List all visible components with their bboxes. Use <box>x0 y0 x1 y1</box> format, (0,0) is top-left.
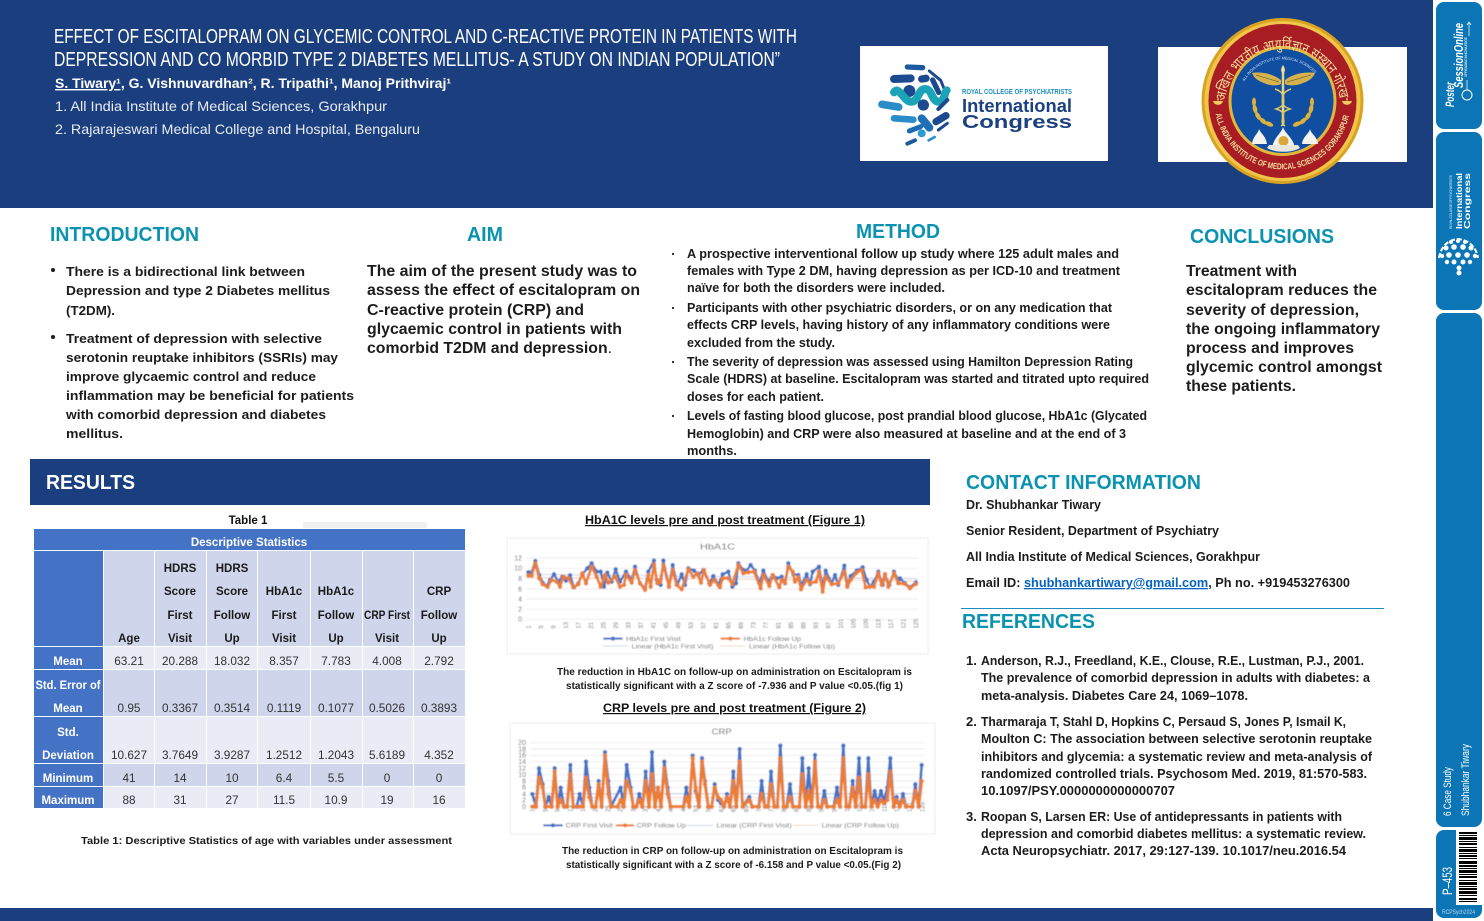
table 1: descriptive statistics: 10.627 <box>111 748 147 762</box>
chart: CRP line chart: 41 <box>656 805 662 812</box>
figure 1 caption: statistically significant with a Z score of -7.936 and P value <0.05.(fig 1) <box>566 680 903 692</box>
chart: CRP line chart: 10 <box>518 772 526 779</box>
table 1: descriptive statistics: 11.5 <box>273 793 295 807</box>
results banner <box>30 459 930 505</box>
chart: CRP line chart: 121 <box>908 801 914 812</box>
chart: HbA1c line chart: 73 <box>752 621 758 629</box>
chart: CRP line chart: 6 <box>522 785 526 792</box>
table 1: descriptive statistics <box>34 515 465 808</box>
chart: CRP line chart: 89 <box>807 805 813 812</box>
table 1: descriptive statistics: 27 <box>225 793 239 807</box>
chart: CRP line chart: 65 <box>732 805 738 812</box>
text block: method bullets: The severity of depression was assessed using Hamilton Depression Rating <box>687 354 1133 369</box>
chart: CRP line chart: 125 <box>920 801 926 812</box>
chart: CRP line chart: 69 <box>744 805 750 812</box>
figure 1 caption <box>557 666 912 692</box>
text block: conclusions <box>1186 263 1383 395</box>
text block: reference list: randomized controlled trials. Psychosom Med. 2019, 81:570-583. <box>981 766 1367 781</box>
text block: introduction bullets: serotonin reuptake inhibitors (SSRIs) may <box>66 350 339 365</box>
sidebar tab: Poster Session Online: Poster <box>1443 81 1457 107</box>
text block: contact details: Senior Resident, Department of Psychiatry <box>966 523 1220 538</box>
text block: reference list: inhibitors and glycemia: a systematic review and meta-analysis of <box>981 749 1373 764</box>
table 1: descriptive statistics: 0.3514 <box>214 701 250 715</box>
table 1: descriptive statistics: 0.3367 <box>162 701 198 715</box>
table 1: descriptive statistics: 0 <box>384 771 391 785</box>
table 1: descriptive statistics: Mean <box>53 656 83 668</box>
table 1: descriptive statistics: Follow <box>421 610 457 622</box>
table 1: descriptive statistics: Up <box>328 633 344 645</box>
chart: HbA1c line chart: 5 <box>539 625 545 629</box>
sidebar tab: poster number and barcode <box>1436 830 1482 918</box>
chart: HbA1c line chart: 29 <box>614 621 620 629</box>
text block: aim: C-reactive protein (CRP) and <box>367 302 584 319</box>
chart: CRP line chart <box>510 723 935 834</box>
affiliations: 2. Rajarajeswari Medical College and Hospital, Bengaluru <box>55 121 420 137</box>
chart: CRP line chart: 101 <box>845 801 851 812</box>
text block: reference list: Acta Neuropsychiatr. 2017, 29:127-139. 10.1017/neu.2016.54 <box>981 843 1347 858</box>
chart: CRP line chart: 105 <box>857 801 863 812</box>
chart: HbA1c line chart: 97 <box>827 621 833 629</box>
chart: CRP line chart: 33 <box>631 805 637 812</box>
chart: CRP line chart: 17 <box>581 805 587 812</box>
logo: RCPsych International Congress: International <box>962 96 1072 116</box>
chart: HbA1c line chart: 4 <box>518 596 522 603</box>
chart: CRP line chart: 21 <box>594 805 600 812</box>
chart: HbA1c line chart: 61 <box>714 621 720 629</box>
text block: reference list <box>966 653 1373 858</box>
sidebar tab: poster number and barcode: P–453 <box>1439 867 1455 895</box>
text block: method bullets: excluded from the study. <box>687 335 835 350</box>
chart: HbA1c line chart: 17 <box>577 621 583 629</box>
chart: HbA1c line chart: 117 <box>889 618 895 629</box>
chart: HbA1c line chart: HbA1c Follow Up <box>743 636 802 643</box>
chart: HbA1c line chart: 105 <box>852 618 858 629</box>
text block: reference list: depression and comorbid diabetes mellitus: a systematic review. <box>981 826 1366 841</box>
text block: introduction bullets: mellitus. <box>66 426 123 441</box>
chart: HbA1c line chart: 8 <box>518 576 522 583</box>
panel: references <box>962 611 1373 858</box>
chart: CRP line chart: 61 <box>719 805 725 812</box>
panel: aim <box>367 224 640 357</box>
table 1: descriptive statistics: 8.357 <box>269 654 299 668</box>
table 1: descriptive statistics: 7.783 <box>321 654 351 668</box>
chart: HbA1c line chart: 45 <box>664 621 670 629</box>
text block: conclusions: the ongoing inflammatory <box>1186 321 1380 338</box>
text block: method bullets: A prospective interventional follow up study where 125 adult males and <box>687 246 1119 261</box>
text block: method bullets: Levels of fasting blood glucose, post prandial blood glucose, HbA1c (Glycated <box>687 408 1147 423</box>
chart: HbA1c line chart: 49 <box>677 621 683 629</box>
chart: CRP line chart: 81 <box>782 805 788 812</box>
sidebar tab: International Congress <box>1436 132 1482 310</box>
table 1: descriptive statistics: 10 <box>225 771 239 785</box>
text block: aim: The aim of the present study was to <box>367 263 637 280</box>
figure 2 caption: The reduction in CRP on follow-up on administration on Escitalopram is <box>562 845 903 857</box>
text block: method bullets: females with Type 2 DM, having depression as per ICD-10 and treatment <box>687 263 1121 278</box>
chart: CRP line chart: 18 <box>518 746 526 753</box>
text block: introduction bullets: with comorbid depression and diabetes <box>65 407 326 422</box>
table 1: descriptive statistics: 6.4 <box>276 771 293 785</box>
table caption: Table 1: Descriptive Statistics of age with variables under assessment <box>81 835 453 847</box>
chart: HbA1c line chart: 10 <box>514 566 522 573</box>
table 1: descriptive statistics: Std. <box>57 727 79 739</box>
chart: HbA1c line chart: 121 <box>902 618 908 629</box>
chart: CRP line chart: 8 <box>522 778 526 785</box>
chart: HbA1c line chart: 93 <box>814 621 820 629</box>
table 1: descriptive statistics: Table 1 <box>229 515 268 527</box>
table 1: descriptive statistics: CRP First <box>364 610 410 622</box>
text block: aim: glycaemic control in patients with <box>367 321 622 338</box>
text block: introduction bullets <box>51 264 354 441</box>
sidebar tab: International Congress: ROYAL COLLEGE OF PSYCHIATRISTS <box>1449 174 1453 229</box>
text block: reference list: Moulton C: The association between selective serotonin reuptake <box>981 731 1372 746</box>
chart: CRP line chart: 5 <box>543 808 549 812</box>
heading: method: METHOD <box>856 221 940 243</box>
table 1: descriptive statistics: First <box>168 610 193 622</box>
table 1: descriptive statistics: 14 <box>173 771 187 785</box>
chart: HbA1c line chart: 13 <box>564 621 570 629</box>
table 1: descriptive statistics: 5.6189 <box>369 748 405 762</box>
sidebar tab: category and author: 6 Case Study <box>1442 767 1454 816</box>
text block: aim: comorbid T2DM and depression. <box>367 340 612 357</box>
chart: HbA1c line chart: 85 <box>789 621 795 629</box>
panel: contact information <box>966 472 1350 590</box>
table 1: descriptive statistics: 19 <box>380 793 394 807</box>
text block: reference list: The prevalence of comorbid depression in adults with diabetes: a <box>981 670 1371 685</box>
text block: reference list: 10.1097/PSY.0000000000000707 <box>981 783 1175 798</box>
chart: CRP line chart: 93 <box>820 805 826 812</box>
table 1: descriptive statistics: 0.1077 <box>318 701 354 715</box>
chart: CRP line chart: 13 <box>568 805 574 812</box>
chart: HbA1c line chart: 25 <box>602 621 608 629</box>
chart: HbA1c line chart: Linear (HbA1c Follow Up) <box>749 643 835 650</box>
figure 2 heading: CRP levels pre and post treatment (Figure 2) <box>603 701 866 715</box>
text block: reference list: 1. <box>966 653 977 668</box>
panel: method <box>672 221 1149 458</box>
chart: HbA1c line chart: 113 <box>877 618 883 629</box>
text block: conclusions: glycemic control amongst <box>1186 359 1383 376</box>
table 1: descriptive statistics: Std. Error of <box>36 680 101 692</box>
table 1: descriptive statistics: 4.352 <box>424 748 454 762</box>
heading: contact information: CONTACT INFORMATION <box>966 472 1201 494</box>
text block: introduction bullets: (T2DM). <box>66 303 115 318</box>
table 1: descriptive statistics: HbA1c <box>318 586 355 598</box>
chart: HbA1c line chart: 9 <box>552 625 558 629</box>
table 1: descriptive statistics: 3.9287 <box>214 748 250 762</box>
affiliations <box>55 98 420 137</box>
text block: method bullets: Participants with other psychiatric disorders, or on any medication that <box>687 300 1113 315</box>
table 1: descriptive statistics: Visit <box>272 633 296 645</box>
chart: HbA1c line chart: 109 <box>864 618 870 629</box>
text block: conclusions: escitalopram reduces the <box>1186 282 1377 299</box>
sidebar tab: International Congress: International <box>1455 173 1464 229</box>
results banner: RESULTS <box>46 472 135 494</box>
chart: HbA1c line chart: 89 <box>802 621 808 629</box>
chart: HbA1c line chart: 69 <box>739 621 745 629</box>
chart: HbA1c line chart: 125 <box>914 618 920 629</box>
chart: CRP line chart: 77 <box>769 805 775 812</box>
text block: reference list: 2. <box>966 714 977 729</box>
table 1: descriptive statistics: Up <box>431 633 447 645</box>
header band <box>0 0 1433 208</box>
chart: HbA1c line chart <box>507 538 928 654</box>
figure 2 caption <box>562 845 903 871</box>
text block: introduction bullets: inflammation may be beneficial for patients <box>66 388 354 403</box>
text block: method bullets: Scale (HDRS) at baseline. Escitalopram was started and titrated upto required <box>687 371 1149 386</box>
chart: HbA1c line chart: 21 <box>589 621 595 629</box>
text block: reference list: Tharmaraja T, Stahl D, Hopkins C, Persaud S, Jones P, Ismail K, <box>981 714 1346 729</box>
table 1: descriptive statistics: First <box>272 610 297 622</box>
text block: method bullets: months. <box>687 443 737 458</box>
heading: conclusions: CONCLUSIONS <box>1190 226 1334 248</box>
chart: HbA1c line chart: 37 <box>639 621 645 629</box>
table 1: descriptive statistics: Score <box>164 586 196 598</box>
table 1: descriptive statistics: Maximum <box>41 795 95 807</box>
text block: method bullets <box>672 246 1149 458</box>
chart: CRP line chart: 14 <box>518 759 526 766</box>
heading: introduction: INTRODUCTION <box>50 224 199 246</box>
table 1: descriptive statistics: 2.792 <box>424 654 454 668</box>
sidebar tab: Poster Session Online: SessionOnline <box>1451 23 1466 88</box>
chart: CRP line chart: 73 <box>757 805 763 812</box>
table 1: descriptive statistics: 0.1119 <box>267 701 301 715</box>
chart: CRP line chart: 0 <box>522 804 526 811</box>
table 1: descriptive statistics: Age <box>118 633 140 645</box>
title <box>54 26 797 71</box>
sidebar tab: category and author: Shubhankar Tiwary <box>1460 744 1472 816</box>
panel: introduction <box>50 224 354 441</box>
table 1: descriptive statistics: Follow <box>214 610 250 622</box>
sidebar tab: poster number and barcode: RCPSych2024 <box>1442 909 1475 916</box>
chart: HbA1c line chart: Linear (HbA1c First Visit) <box>632 643 713 650</box>
table 1: descriptive statistics: 4.008 <box>372 654 402 668</box>
table 1: descriptive statistics: 5.5 <box>328 771 345 785</box>
title: EFFECT OF ESCITALOPRAM ON GLYCEMIC CONTROL AND C-REACTIVE PROTEIN IN PATIENTS WITH <box>54 26 797 48</box>
table 1: descriptive statistics: 41 <box>122 771 136 785</box>
chart: HbA1c line chart: 1 <box>527 625 533 629</box>
text block: method bullets: naïve for both the disorders were included. <box>687 280 945 295</box>
table 1: descriptive statistics: 0 <box>436 771 443 785</box>
text block: introduction bullets: improve glycaemic control and reduce <box>66 369 316 384</box>
table 1: descriptive statistics: 1.2043 <box>318 748 354 762</box>
sidebar tab: Poster Session Online: SPREADING KNOWLEDGE <box>1464 36 1468 77</box>
table 1: descriptive statistics: 20.288 <box>162 654 198 668</box>
logo: AIIMS Gorakhpur seal <box>1158 18 1407 184</box>
chart: CRP line chart: 117 <box>895 802 901 812</box>
table 1: descriptive statistics: Descriptive Statistics <box>191 537 307 549</box>
chart: CRP line chart: CRP First Visit <box>566 823 613 830</box>
text block: introduction bullets: There is a bidirectional link between <box>66 264 305 279</box>
chart: CRP line chart: 4 <box>522 791 526 798</box>
heading: aim: AIM <box>467 224 503 246</box>
chart: HbA1c line chart: HbA1c First Visit <box>626 636 681 643</box>
chart: HbA1c line chart: 0 <box>518 617 522 624</box>
chart: CRP line chart: 53 <box>694 805 700 812</box>
table 1: descriptive statistics: 18.032 <box>214 654 250 668</box>
logo: RCPsych International Congress: Congress <box>962 112 1072 132</box>
logo: RCPsych International Congress: ROYAL COLLEGE OF PSYCHIATRISTS <box>962 89 1072 96</box>
chart: HbA1c line chart: 101 <box>839 618 845 629</box>
footer band <box>0 908 1433 921</box>
table 1: descriptive statistics: 10.9 <box>325 793 347 807</box>
chart: CRP line chart: 37 <box>644 805 650 812</box>
text block: contact details: All India Institute of Medical Sciences, Gorakhpur <box>966 549 1260 564</box>
chart: CRP line chart: 29 <box>619 805 625 812</box>
table 1: descriptive statistics: 1.2512 <box>266 748 302 762</box>
chart: CRP line chart: 85 <box>795 805 801 812</box>
figure 1 caption: The reduction in HbA1C on follow-up on administration on Escitalopram is <box>557 666 912 678</box>
text block: reference list: 3. <box>966 809 977 824</box>
authors: S. Tiwary¹, G. Vishnuvardhan², R. Tripathi¹, Manoj Prithviraj¹ <box>55 75 451 91</box>
chart: CRP line chart: 9 <box>556 808 562 812</box>
chart: HbA1c line chart: 41 <box>652 621 658 629</box>
table 1: descriptive statistics: 0.3893 <box>421 701 457 715</box>
figure 2 caption: statistically significant with a Z score of -6.158 and P value <0.05.(Fig 2) <box>566 859 901 871</box>
text block: method bullets: doses for each patient. <box>687 389 824 404</box>
chart: CRP line chart: CRP Follow Up <box>637 823 687 830</box>
text block: contact details <box>966 497 1350 590</box>
chart: HbA1c line chart: 6 <box>518 586 522 593</box>
chart: CRP line chart: 20 <box>518 740 526 747</box>
sidebar tab: category and author <box>1436 313 1482 827</box>
table 1: descriptive statistics: CRP <box>427 586 451 598</box>
text block: introduction bullets: Treatment of depression with selective <box>66 331 322 346</box>
table 1: descriptive statistics: 0.95 <box>118 701 141 715</box>
table 1: descriptive statistics: Follow <box>318 610 354 622</box>
heading: references: REFERENCES <box>962 611 1095 633</box>
figure 1 heading: HbA1C levels pre and post treatment (Figure 1) <box>585 513 865 527</box>
sidebar tab: Poster Session Online <box>1436 2 1482 129</box>
sidebar tab: International Congress: Congress <box>1463 172 1472 229</box>
text block: conclusions: these patients. <box>1186 378 1296 395</box>
text block: introduction bullets: Depression and type 2 Diabetes mellitus <box>66 283 330 298</box>
table 1: descriptive statistics: Visit <box>168 633 192 645</box>
text block: conclusions: severity of depression, <box>1186 302 1359 319</box>
text block: method bullets: Hemoglobin) and CRP were also measured at baseline and at the end of 3 <box>687 426 1126 441</box>
chart: HbA1c line chart: 81 <box>777 621 783 629</box>
text block: aim: assess the effect of escitalopram on <box>367 282 640 299</box>
table 1: descriptive statistics: HDRS <box>164 563 197 575</box>
chart: CRP line chart: 113 <box>883 802 889 812</box>
chart: HbA1c line chart: HbA1C <box>700 541 735 551</box>
table 1: descriptive statistics: 31 <box>173 793 187 807</box>
chart: HbA1c line chart: 53 <box>689 621 695 629</box>
table 1: descriptive statistics: 3.7649 <box>162 748 198 762</box>
chart: HbA1c line chart: 33 <box>627 621 633 629</box>
title: DEPRESSION AND CO MORBID TYPE 2 DIABETES MELLITUS- A STUDY ON INDIAN POPULATION” <box>54 49 780 71</box>
text block: aim <box>367 263 640 357</box>
chart: CRP line chart: 49 <box>681 805 687 812</box>
chart: HbA1c line chart: 57 <box>702 621 708 629</box>
logo: AIIMS Gorakhpur seal: ALL INDIA INSTITUTE OF MEDICAL SCIENCES <box>1242 56 1316 82</box>
chart: CRP line chart: 45 <box>669 805 675 812</box>
affiliations: 1. All India Institute of Medical Sciences, Gorakhpur <box>55 98 387 114</box>
chart: CRP line chart: 109 <box>870 801 876 812</box>
text block: contact details: Email ID: shubhankartiwary@gmail.com, Ph no. +919453276300 <box>966 575 1350 590</box>
chart: CRP line chart: 1 <box>531 808 537 812</box>
table 1: descriptive statistics: 0.5026 <box>369 701 405 715</box>
chart: HbA1c line chart: 2 <box>518 607 522 614</box>
table 1: descriptive statistics: Minimum <box>43 773 93 785</box>
table 1: descriptive statistics: Score <box>216 586 248 598</box>
chart: CRP line chart: 16 <box>518 753 526 760</box>
logo: RCPsych International Congress <box>860 46 1108 161</box>
text block: conclusions: process and improves <box>1186 340 1354 357</box>
chart: CRP line chart: 97 <box>832 805 838 812</box>
text block: method bullets: effects CRP levels, having history of any inflammatory conditions were <box>687 317 1110 332</box>
table 1: descriptive statistics: Up <box>224 633 240 645</box>
text block: reference list: Roopan S, Larsen ER: Use of antidepressants in patients with <box>981 809 1342 824</box>
table 1: descriptive statistics: Mean <box>53 703 83 715</box>
chart: HbA1c line chart: 77 <box>764 621 770 629</box>
text block: contact details: Dr. Shubhankar Tiwary <box>966 497 1102 512</box>
table 1: descriptive statistics: Visit <box>375 633 399 645</box>
chart: CRP line chart: 57 <box>707 805 713 812</box>
table 1: descriptive statistics: 16 <box>432 793 446 807</box>
table 1: descriptive statistics: HDRS <box>216 563 249 575</box>
chart: HbA1c line chart: 65 <box>727 621 733 629</box>
chart: HbA1c line chart: 12 <box>514 555 522 562</box>
chart: CRP line chart: 12 <box>518 766 526 773</box>
table 1: descriptive statistics: HbA1c <box>266 586 303 598</box>
table 1: descriptive statistics: 88 <box>122 793 136 807</box>
text block: reference list: meta-analysis. Diabetes Care 24, 1069–1078. <box>981 688 1248 703</box>
text block: reference list: Anderson, R.J., Freedland, K.E., Clouse, R.E., Lustman, P.J., 2001. <box>981 653 1364 668</box>
logo: AIIMS Gorakhpur seal: ALL INDIA INSTITUTE OF MEDICAL SCIENCES GORAKHPUR <box>1216 114 1349 170</box>
chart: CRP line chart: Linear (CRP First Visit) <box>717 823 792 830</box>
table 1: descriptive statistics: Deviation <box>42 750 94 762</box>
text block: conclusions: Treatment with <box>1186 263 1297 280</box>
chart: CRP line chart: CRP <box>712 726 732 736</box>
table 1: descriptive statistics: 63.21 <box>114 654 144 668</box>
chart: CRP line chart: Linear (CRP Follow Up) <box>822 823 899 830</box>
panel: conclusions <box>1186 226 1383 395</box>
chart: CRP line chart: 25 <box>606 805 612 812</box>
chart: CRP line chart: 2 <box>522 798 526 805</box>
